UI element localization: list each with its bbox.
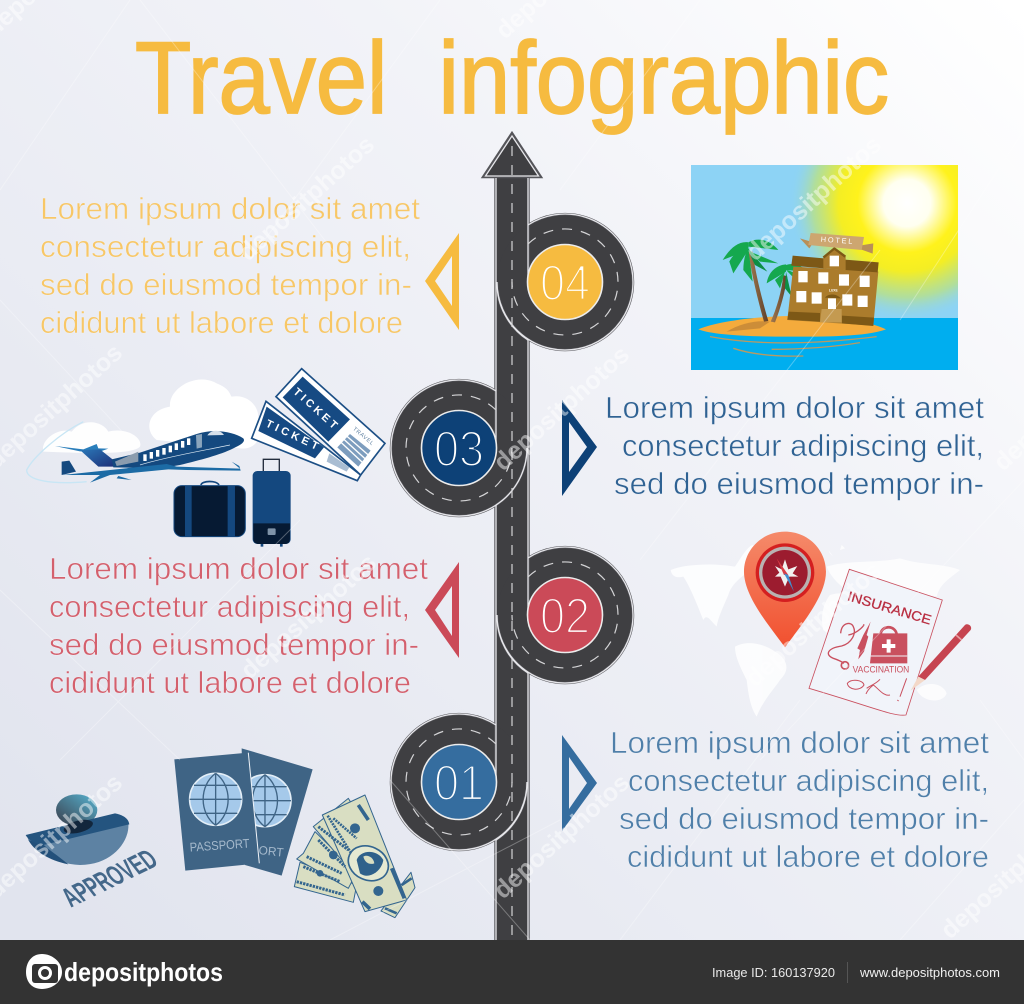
illustration: approved stamp: APPROVED bbox=[55, 844, 164, 913]
arrow: step 02 pointer bbox=[425, 562, 459, 658]
step 04 badge: 04 bbox=[540, 255, 590, 311]
arrow: step 03 pointer bbox=[562, 400, 597, 496]
step 03 badge bbox=[422, 410, 496, 486]
text block: step 04: Lorem ipsum dolor sit amet bbox=[40, 191, 420, 226]
illustration: banknotes bbox=[294, 795, 415, 918]
text block: step 01: cididunt ut labore et dolore bbox=[627, 839, 989, 874]
text block: step 02: consectetur adipiscing elit, bbox=[49, 589, 410, 624]
illustration: plane, tickets and luggage: TICKET bbox=[291, 386, 340, 432]
text block: step 04 bbox=[40, 191, 420, 340]
illustration: world map, location pin and insurance form bbox=[671, 532, 971, 717]
front ticket bbox=[276, 369, 385, 475]
lane markings bbox=[406, 146, 618, 940]
title: Travel infographic bbox=[135, 21, 889, 135]
illustration: plane, tickets and luggage: TRAVEL bbox=[351, 426, 374, 447]
illustration: plane, tickets and luggage: TICKET bbox=[264, 418, 320, 453]
clouds bbox=[43, 422, 140, 453]
road surface bbox=[391, 133, 633, 940]
illustration: passports: PASSPORT bbox=[189, 836, 250, 855]
text block: step 04: consectetur adipiscing elit, bbox=[40, 229, 411, 264]
palm trees bbox=[748, 252, 768, 322]
text block: step 02: Lorem ipsum dolor sit amet bbox=[49, 551, 428, 586]
text block: step 02: sed do eiusmod tempor in- bbox=[49, 627, 419, 662]
text block: step 01 bbox=[610, 725, 989, 874]
illustration: plane, tickets and luggage bbox=[27, 369, 385, 547]
text block: step 02 bbox=[49, 551, 428, 700]
text block: step 04: cididunt ut labore et dolore bbox=[40, 305, 403, 340]
world map bbox=[671, 545, 960, 717]
illustration: approved stamp bbox=[26, 794, 164, 913]
text block: step 01: Lorem ipsum dolor sit amet bbox=[610, 725, 989, 760]
plane bbox=[55, 444, 108, 452]
insurance form: INSURANCE bbox=[846, 588, 933, 628]
illustration: hotel on island: LUXE bbox=[829, 289, 839, 293]
text block: step 04: sed do eiusmod tempor in- bbox=[40, 267, 412, 302]
watermark layer: depositphotos bbox=[488, 768, 635, 904]
icon: depositphotos camera logo bbox=[26, 954, 62, 989]
rolling bag bbox=[263, 459, 279, 471]
back ticket bbox=[252, 401, 361, 481]
step 02 badge bbox=[528, 578, 602, 652]
step 02 badge: 02 bbox=[540, 588, 590, 644]
road with four loops bbox=[391, 133, 633, 940]
step 01 badge: 01 bbox=[434, 755, 484, 811]
illustration: hotel on island bbox=[691, 165, 958, 370]
illustration: passports: ORT bbox=[258, 843, 285, 860]
text block: step 03 bbox=[605, 390, 984, 501]
hotel building bbox=[787, 267, 878, 326]
suitcase bbox=[201, 481, 219, 485]
watermark layer: depositphotos bbox=[233, 130, 380, 266]
watermark layer: depositphotos bbox=[740, 556, 887, 692]
footer bar bbox=[0, 940, 1024, 1004]
arrow: step 04 pointer bbox=[425, 233, 459, 330]
island bbox=[698, 316, 886, 337]
illustration: hotel on island: HOTEL bbox=[821, 235, 853, 246]
hotel sign bbox=[800, 238, 813, 248]
step 01 badge bbox=[422, 744, 496, 820]
arrow: step 01 pointer bbox=[562, 735, 597, 831]
illustration: passports bbox=[174, 748, 313, 876]
text block: step 02: cididunt ut labore et dolore bbox=[49, 665, 411, 700]
brand name: depositphotos bbox=[64, 957, 223, 987]
website: www.depositphotos.com bbox=[859, 965, 1000, 980]
pen bbox=[918, 624, 971, 680]
step 03 badge: 03 bbox=[434, 421, 484, 477]
text block: step 01: sed do eiusmod tempor in- bbox=[619, 801, 989, 836]
text block: step 01: consectetur adipiscing elit, bbox=[628, 763, 989, 798]
insurance form bbox=[809, 569, 942, 715]
text block: step 03: Lorem ipsum dolor sit amet bbox=[605, 390, 984, 425]
road edges bbox=[391, 133, 633, 940]
image id: Image ID: 160137920 bbox=[712, 965, 835, 980]
insurance form: VACCINATION bbox=[853, 664, 909, 674]
watermark layer: depositphotos bbox=[488, 340, 635, 476]
watermark layer: depositphotos bbox=[235, 548, 382, 684]
text block: step 03: sed do eiusmod tempor in- bbox=[614, 466, 984, 501]
text block: step 03: consectetur adipiscing elit, bbox=[622, 428, 984, 463]
location pin bbox=[744, 532, 826, 647]
watermark layer: depositphotos bbox=[740, 130, 887, 266]
step 04 badge bbox=[528, 244, 602, 320]
